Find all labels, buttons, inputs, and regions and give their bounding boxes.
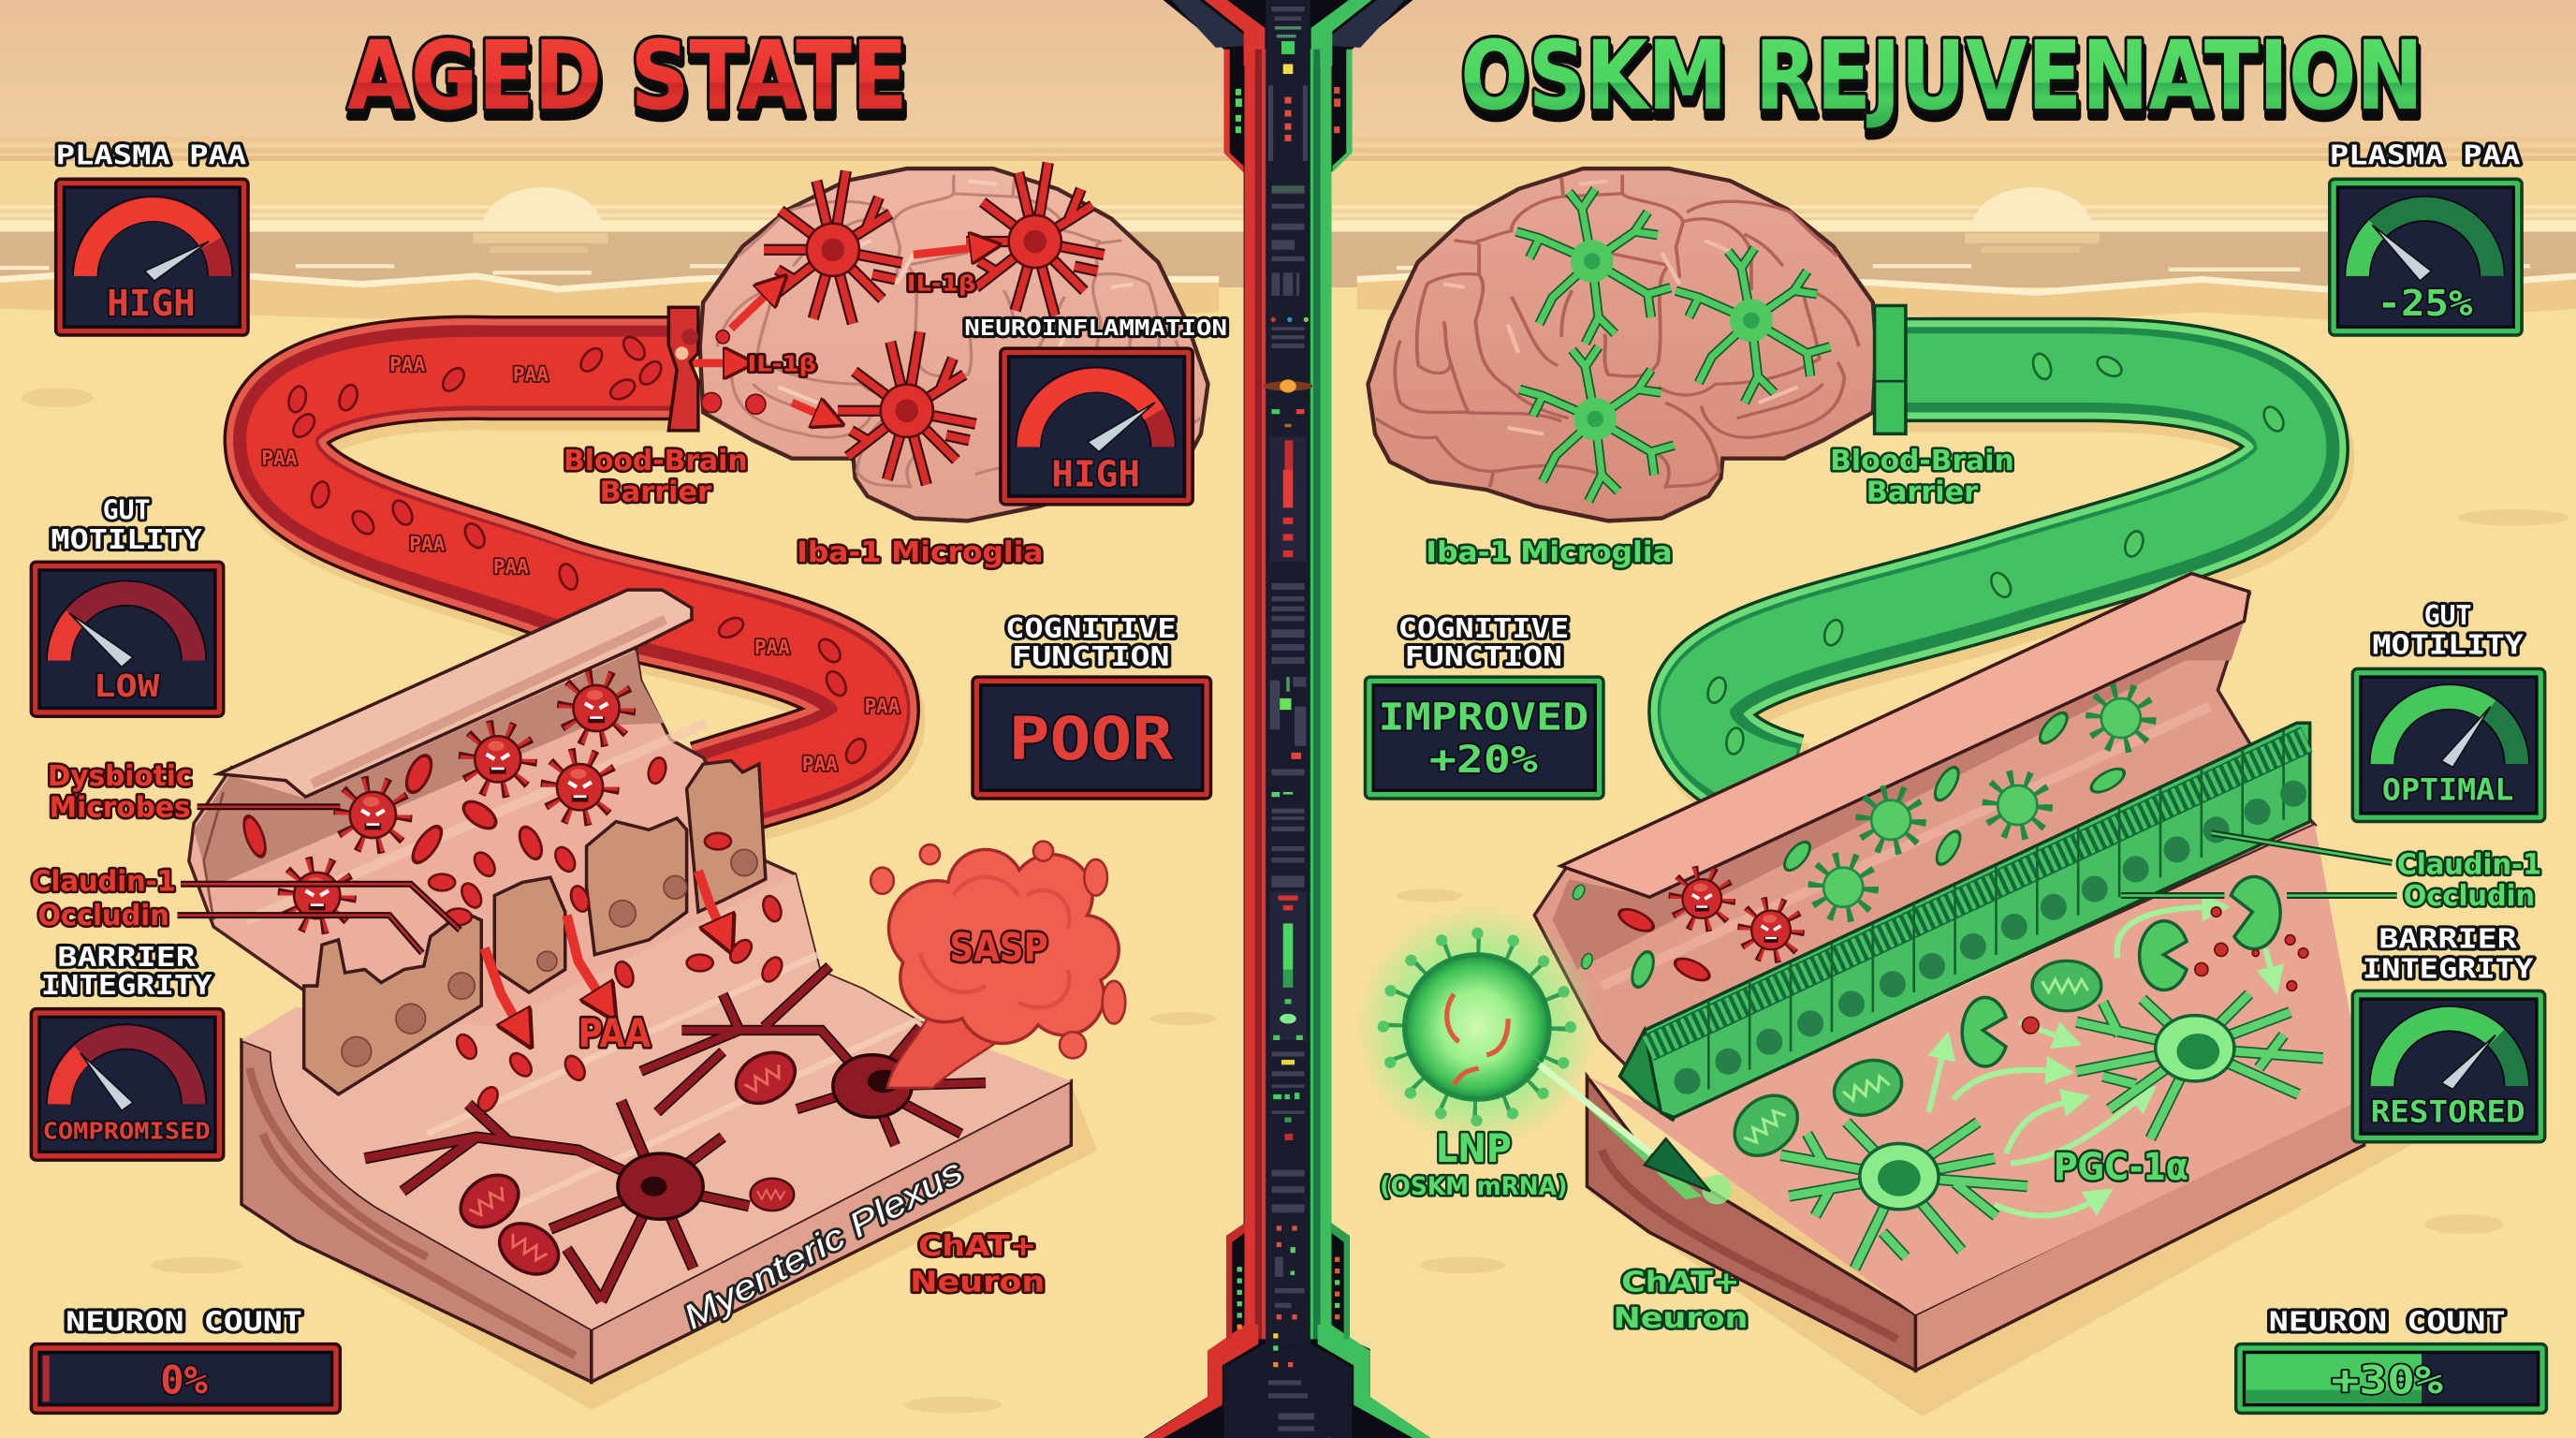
title: OSKM rejuvenation: OSKM REJUVENATION [1460,22,2423,132]
gauge: gut motility low: LOW [94,668,160,704]
macrophage pac-men clearing debris [1962,876,2308,1066]
gauge: plasma PAA -25% [2330,140,2522,335]
healing signal arrows [1928,907,2274,1216]
gauge: neuroinflammation high: HIGH [1051,454,1140,496]
rejuvenation labels [1380,445,2541,1335]
callout lines [178,807,2397,953]
metric: cognitive function poor [973,613,1211,799]
aged state labels: Dysbiotic [48,760,192,793]
microglia: activated [764,163,1104,485]
bar: neuron count 0%: 0% [160,1357,209,1402]
bar: neuron count +30% [2236,1307,2546,1413]
rejuvenation labels: ChAT+ [1621,1267,1740,1299]
aged state labels: Iba-1 Microglia [797,536,1043,569]
PAA vessel labels: PAA [493,555,529,579]
dark wall band under rim [194,651,664,888]
PAA vessel labels: PAA [261,447,298,470]
gauge: neuroinflammation high [964,316,1227,505]
luminal PAA particles [240,752,786,1115]
mRNA strands [1447,994,1508,1084]
PAA vessel labels: PAA [389,353,426,376]
right vessel, cleared [1695,351,2302,795]
bar: neuron count +30%: +30% [2331,1357,2444,1402]
right gut cross-section [1534,574,2432,1416]
gauge: barrier integrity compromised: COMPROMISED [43,1117,211,1144]
SASP cloud [871,842,1125,1088]
upper-right flare [1332,0,1405,48]
aged state labels: Occludin [37,900,169,932]
slab side face, right [592,1081,1071,1382]
gauge: barrier integrity compromised [31,942,224,1160]
slab shadow [1587,1097,2432,1416]
rejuvenation labels: PGC-1α [2054,1145,2188,1189]
delivery beam [1528,1051,1732,1204]
microbes: green commensal and residual red [1676,692,2147,955]
right brain with resting microglia [1368,169,1876,521]
rejuvenation labels: Occludin [2404,880,2535,913]
dark wall band under rim [1553,621,2244,970]
gauge: plasma PAA -25%: -25% [2378,283,2472,325]
rejuvenation labels: Blood-Brain [1830,445,2014,477]
slab side face, right [1915,1093,2365,1371]
upper-left flare [1171,0,1244,48]
aged state labels: Neuron [910,1267,1045,1299]
PAA vessel labels [261,353,900,775]
rejuvenation labels: LNP [1436,1125,1512,1171]
slab side face, left [242,1040,592,1382]
PAA vessel labels: PAA [864,695,900,718]
pipe rim [1560,574,2249,897]
IL-1 beta signal arrows [687,246,986,419]
bar: neuron count 0%: NEURON COUNT [66,1307,302,1338]
damaged mitochondria [451,1042,804,1284]
microglia: resting [1516,189,1830,501]
luminal particles [1571,709,2128,990]
aged state labels: ChAT+ [918,1230,1036,1263]
gauge: neuroinflammation high: NEUROINFLAMMATION [964,316,1227,341]
metric: cognitive function poor: FUNCTION [1012,641,1170,672]
metric: cognitive function poor: COGNITIVE [1005,613,1177,644]
bar: neuron count +30%: NEURON COUNT [2269,1307,2506,1338]
aged state labels: IL-1β [748,353,816,377]
green divider strip [1310,50,1431,1438]
aged state labels [31,272,1045,1299]
rejuvenation labels: Barrier [1866,476,1978,508]
PAA vessel labels: PAA [409,532,446,555]
gauge: barrier integrity compromised: INTEGRITY [41,970,212,1001]
left blood-brain barrier, breached [668,307,698,431]
gauge: gut motility low: MOTILITY [51,524,202,555]
title: aged state: AGED STATE [347,22,908,132]
aged state labels: PAA [578,1010,651,1056]
leaking PAA arrows [485,871,724,1032]
gauge: gut motility optimal: MOTILITY [2372,630,2524,661]
pipe interior [1534,594,2315,1112]
left brain with activated microglia [687,163,1208,521]
PAA particles in vessel [286,333,870,767]
gauge: barrier integrity restored: BARRIER [2378,924,2517,955]
gauge: gut motility optimal [2352,600,2545,822]
left gut cross-section [189,590,1125,1410]
aged state labels: Barrier [600,476,711,508]
gauge: gut motility low [31,495,224,716]
rejuvenation labels: Claudin-1 [2397,849,2541,882]
gauge: gut motility low: GUT [103,495,151,526]
gauge: barrier integrity compromised: BARRIER [57,942,196,973]
SASP cloud: SASP [949,925,1048,971]
myenteric plexus label: Myenteric Plexus [677,1152,969,1337]
rejuvenation labels: (OSKM mRNA) [1380,1173,1567,1201]
aged state labels: IL-1β [907,272,976,297]
pipe interior [189,648,920,1068]
gauge: plasma PAA -25%: PLASMA PAA [2330,140,2520,171]
metric: cognitive function improved: +20% [1429,738,1539,782]
dysbiotic microbes [287,679,626,925]
central electronics panel [1224,0,1352,1438]
metric: cognitive function improved [1365,613,1603,799]
intact epithelium cells [1620,723,2310,1121]
metric: cognitive function improved: COGNITIVE [1398,613,1569,644]
restored mitochondria [1722,961,2101,1167]
gauge: gut motility optimal: OPTIMAL [2382,774,2513,808]
bar: neuron count 0% [31,1307,340,1413]
left vessel carrying PAA [261,333,900,801]
damaged myenteric neurons [365,966,986,1301]
PAA vessel labels: PAA [754,636,790,659]
rejuvenation labels: Iba-1 Microglia [1426,536,1673,569]
PAA vessel labels: PAA [802,752,838,775]
central divider column [1144,0,1431,1438]
metric: cognitive function improved: FUNCTION [1405,641,1562,672]
title: aged state: AGED STATE [349,30,909,140]
gauge: plasma PAA high [56,140,248,335]
gauge: gut motility optimal: GUT [2424,600,2471,631]
slab top surface [1587,825,2365,1314]
aged state labels: Blood-Brain [564,445,748,477]
slab shadow [242,1084,1097,1410]
pipe rim [218,590,692,797]
gauge: plasma PAA high: HIGH [107,283,196,325]
particles in right vessel [1705,351,2288,756]
slab side face, left [1587,1077,1915,1371]
rejuvenation labels: Neuron [1614,1302,1748,1335]
slab top surface [242,874,1071,1329]
gauge: barrier integrity restored: RESTORED [2371,1096,2525,1130]
aged state labels: Microbes [50,791,191,824]
metric: cognitive function poor: POOR [1009,704,1174,773]
gauge: barrier integrity restored: INTEGRITY [2363,953,2533,984]
red divider strip [1145,50,1266,1438]
PAA vessel labels: PAA [513,362,549,386]
broken epithelium cells [304,761,766,1094]
LNP delivery particle [1355,905,1732,1204]
metric: cognitive function improved: IMPROVED [1379,695,1588,739]
gauge: plasma PAA high: PLASMA PAA [56,140,246,171]
gauge: barrier integrity restored [2352,924,2545,1142]
restored neurons [1781,994,2323,1269]
aged state labels: Claudin-1 [31,865,176,898]
right blood-brain barrier, intact [1875,305,1906,433]
